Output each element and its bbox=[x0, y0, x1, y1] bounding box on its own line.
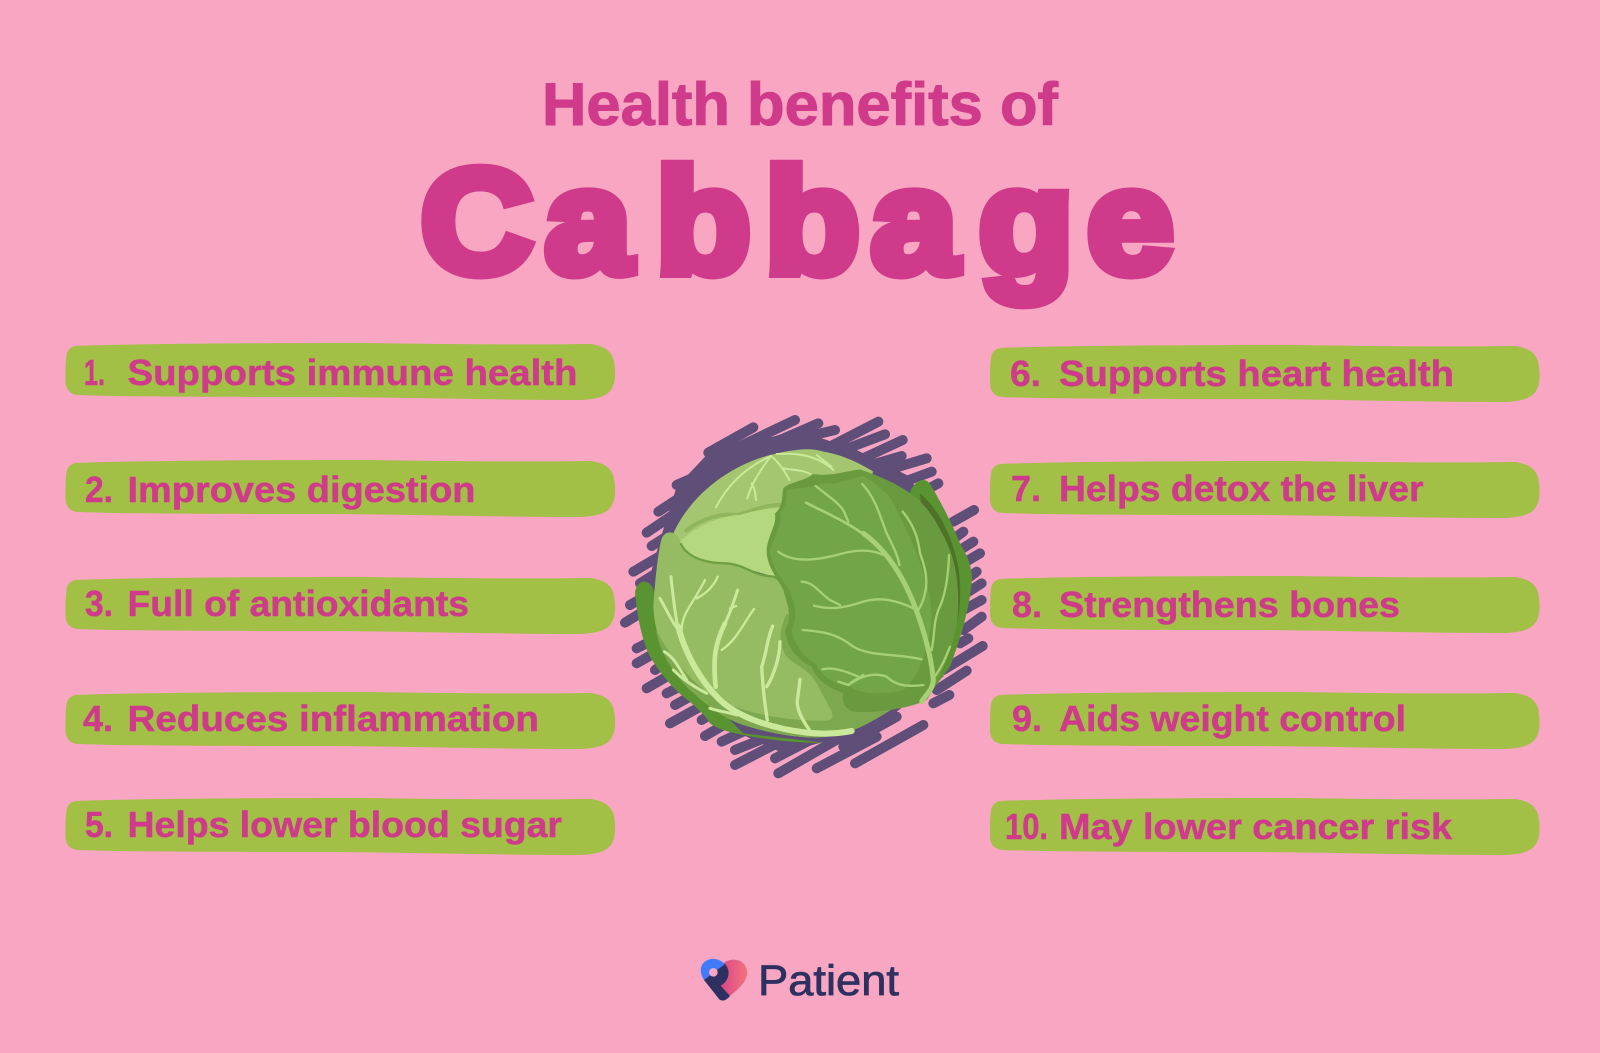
title: Health benefits of: Health benefits of bbox=[542, 71, 1059, 138]
right leaf veins bbox=[778, 484, 950, 702]
left leaf veins bbox=[660, 577, 852, 733]
benefit 5: Helps lower blood sugar bbox=[128, 804, 562, 845]
benefit 7: Helps detox the liver bbox=[1059, 468, 1424, 509]
logo: Patient bbox=[701, 957, 899, 1005]
benefit 9 bbox=[990, 692, 1540, 749]
right front leaf bbox=[767, 469, 958, 712]
title: Cabbage: Cabbage bbox=[421, 140, 1173, 305]
benefit 9: Aids weight control bbox=[1059, 698, 1406, 739]
benefit 1: Supports immune health bbox=[128, 352, 578, 393]
benefit 2: 2. bbox=[85, 469, 113, 510]
purple scribble background bbox=[625, 420, 983, 773]
benefit 7: 7. bbox=[1011, 468, 1041, 509]
benefit 4: Reduces inflammation bbox=[128, 698, 539, 739]
benefit 6 bbox=[990, 345, 1540, 402]
benefit 1: 1. bbox=[84, 352, 105, 393]
benefit 3 bbox=[66, 577, 615, 634]
benefit 9: 9. bbox=[1012, 698, 1042, 739]
benefit 10 bbox=[990, 798, 1540, 855]
benefit 2 bbox=[66, 460, 615, 517]
icon: cabbage illustration bbox=[625, 420, 983, 773]
benefit 6: Supports heart health bbox=[1059, 353, 1454, 394]
benefit 5: 5. bbox=[85, 804, 113, 845]
back leaves bbox=[635, 582, 823, 743]
light inner leaf bbox=[680, 508, 810, 577]
benefit 5 bbox=[66, 798, 615, 855]
wordmark: Patient bbox=[758, 957, 899, 1005]
benefit 8: 8. bbox=[1012, 584, 1042, 625]
benefit 3: 3. bbox=[85, 583, 113, 624]
benefit 8: Strengthens bones bbox=[1059, 584, 1400, 625]
benefit 6: 6. bbox=[1010, 353, 1041, 394]
benefit 3: Full of antioxidants bbox=[128, 583, 469, 624]
top leaf bbox=[673, 449, 873, 543]
icon: heart logo mark bbox=[701, 959, 747, 1001]
benefit 1 bbox=[66, 343, 615, 400]
benefit 4 bbox=[66, 692, 615, 749]
benefit 10: 10. bbox=[1005, 806, 1048, 847]
benefit 10: May lower cancer risk bbox=[1059, 806, 1453, 847]
benefit 7 bbox=[990, 461, 1540, 518]
benefit 2: Improves digestion bbox=[128, 469, 476, 510]
benefit 4: 4. bbox=[83, 698, 113, 739]
benefit 8 bbox=[990, 576, 1540, 633]
top leaf veins bbox=[716, 454, 833, 507]
left main leaf bbox=[653, 532, 887, 737]
